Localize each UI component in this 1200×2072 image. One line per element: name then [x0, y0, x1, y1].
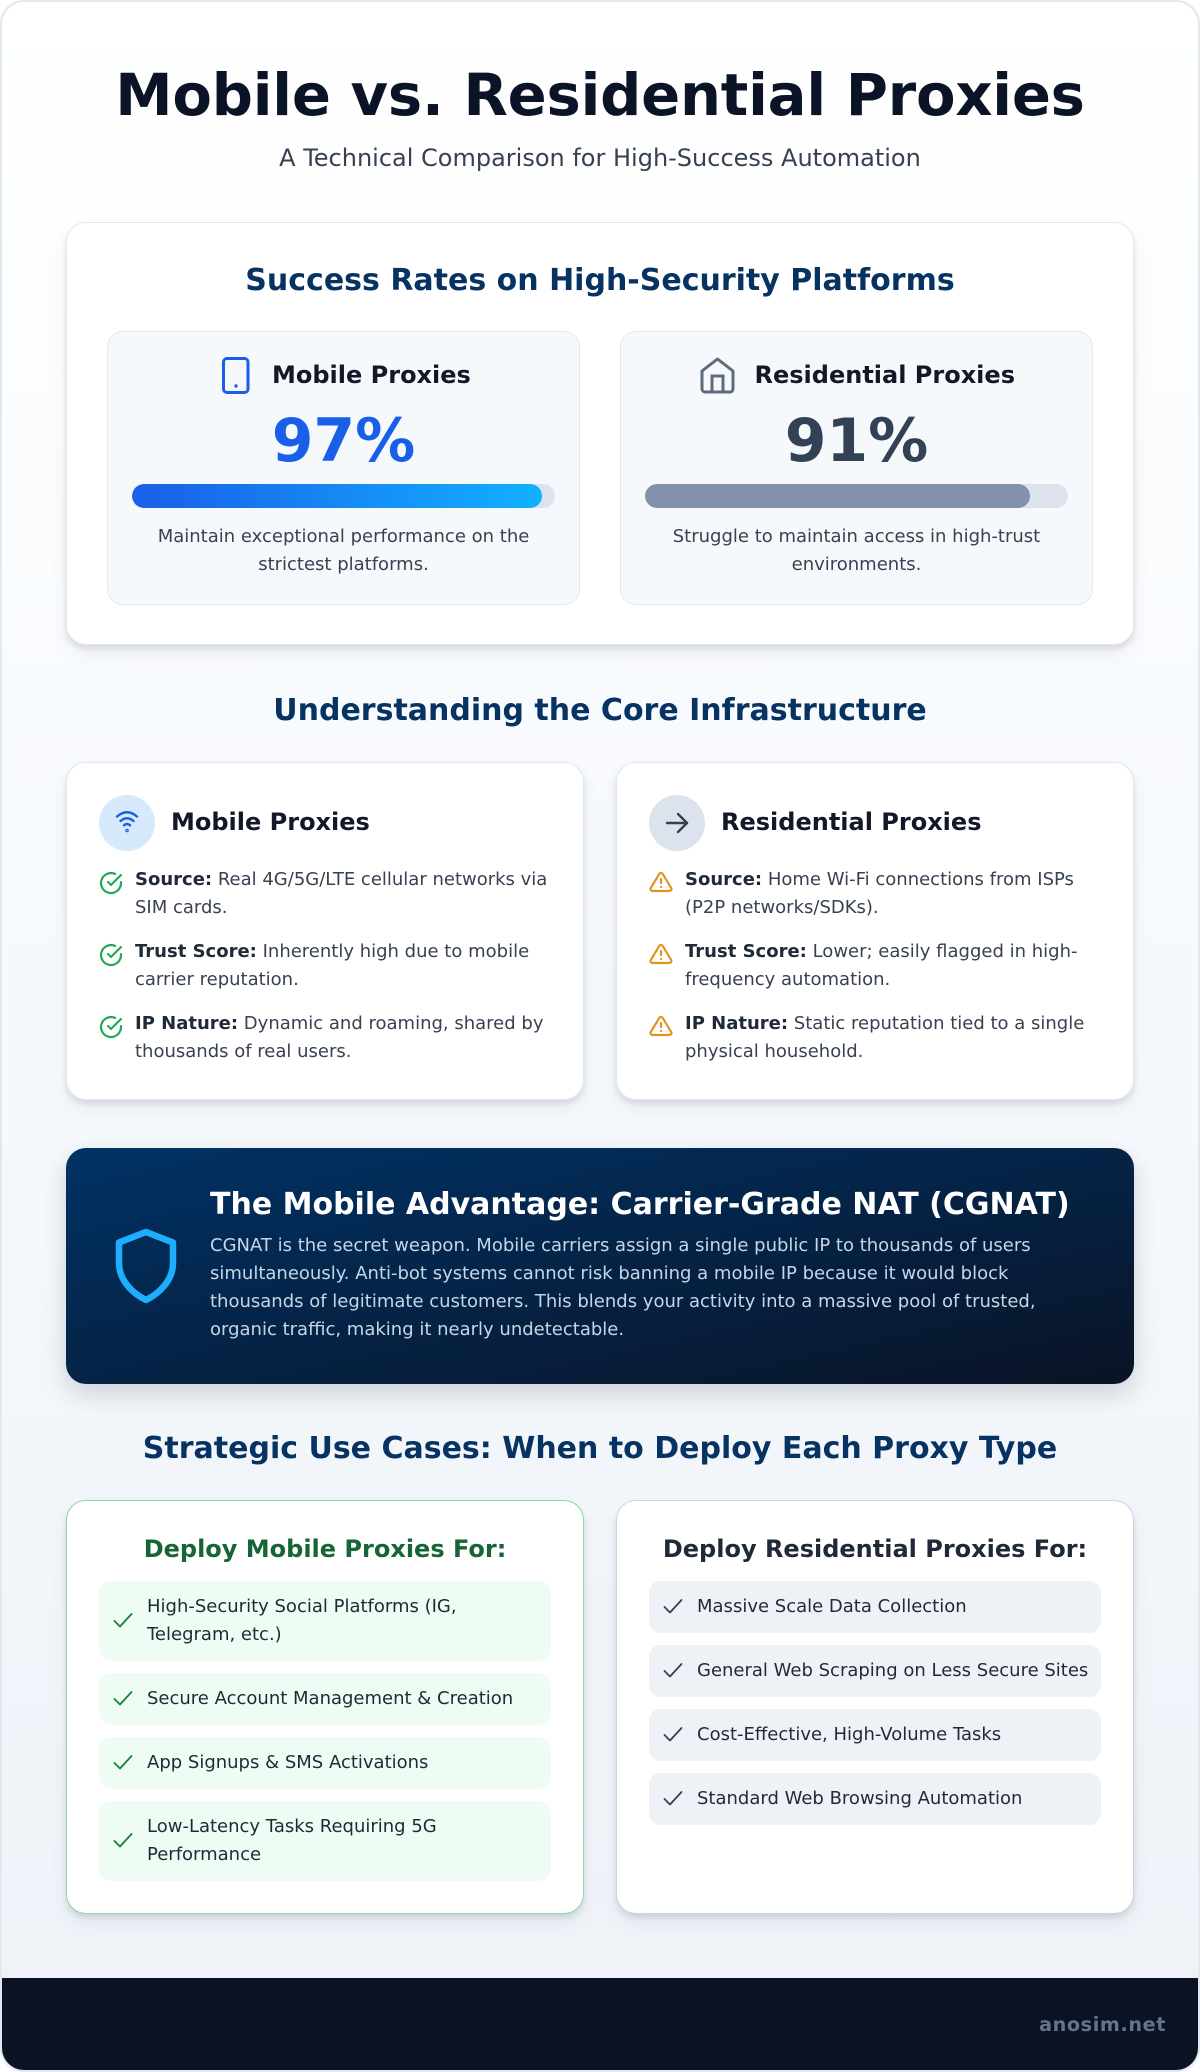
- title: Mobile vs. Residential Proxies: [115, 62, 1085, 129]
- list item: ip nature: [685, 1013, 1084, 1062]
- list item: source: [685, 869, 1074, 918]
- description: mobile: strictest platforms.: [258, 554, 429, 575]
- list item: ip nature: IP Nature: Static reputation tied to a single: [685, 1013, 1084, 1034]
- text block: CGNAT explanation: simultaneously. Anti-bot systems cannot risk banning a mobile IP because it would block: [210, 1263, 1008, 1284]
- panel: residential use cases: [616, 1500, 1134, 1914]
- icon: phone: [222, 357, 250, 394]
- list item: source: SIM cards.: [135, 897, 228, 918]
- list item: ip nature: thousands of real users.: [135, 1041, 352, 1062]
- footer: [2, 1978, 1198, 2070]
- label: residential proxies: Residential Proxies: [754, 361, 1015, 389]
- panel: success rates: [66, 222, 1134, 645]
- use case: social platforms: [99, 1581, 551, 1661]
- use case: browsing automation: [649, 1773, 1101, 1825]
- text block: CGNAT explanation: thousands of legitimate customers. This blends your activity into a massive pool of trusted,: [210, 1291, 1036, 1312]
- text block: CGNAT explanation: CGNAT is the secret weapon. Mobile carriers assign a single public IP to thousands of users: [210, 1235, 1031, 1256]
- list item: trust score: frequency automation.: [685, 969, 890, 990]
- heading: deploy residential: Deploy Residential Proxies For:: [663, 1535, 1087, 1563]
- icon: check circle: [100, 944, 122, 966]
- description: residential: Struggle to maintain access in high-trust: [673, 526, 1040, 547]
- use case: social platforms: Telegram, etc.): [147, 1624, 282, 1645]
- description: mobile: [158, 526, 529, 575]
- use case: data collection: Massive Scale Data Collection: [697, 1596, 967, 1617]
- list item: trust score: Trust Score: Inherently high due to mobile: [135, 941, 529, 962]
- list item: trust score: carrier reputation.: [135, 969, 299, 990]
- text block: CGNAT explanation: [210, 1235, 1036, 1340]
- description: residential: environments.: [792, 554, 921, 575]
- list item: ip nature: physical household.: [685, 1041, 863, 1062]
- description: mobile: Maintain exceptional performance on the: [158, 526, 529, 547]
- list item: trust score: [685, 941, 1077, 990]
- label: mobile proxies: Mobile Proxies: [272, 361, 471, 389]
- description: residential: [673, 526, 1040, 575]
- footer brand: anosim.net: [1039, 2013, 1166, 2036]
- list item: ip nature: IP Nature: Dynamic and roaming, shared by: [135, 1013, 543, 1034]
- use case: low latency: Low-Latency Tasks Requiring 5G: [147, 1816, 437, 1837]
- heading: success rates: Success Rates on High-Security Platforms: [245, 263, 955, 298]
- use case: web scraping: [649, 1645, 1101, 1697]
- list item: trust score: Trust Score: Lower; easily flagged in high-: [685, 941, 1077, 962]
- use case: web scraping: General Web Scraping on Less Secure Sites: [697, 1660, 1088, 1681]
- heading: use cases: Strategic Use Cases: When to Deploy Each Proxy Type: [143, 1431, 1057, 1466]
- panel: mobile infrastructure: [66, 762, 584, 1100]
- icon: check circle: [100, 1016, 122, 1038]
- icon: wifi: [99, 795, 155, 851]
- use case: high volume: [649, 1709, 1101, 1761]
- list item: ip nature: [135, 1013, 543, 1062]
- subtitle: A Technical Comparison for High-Success Automation: [279, 144, 921, 172]
- list item: source: Source: Home Wi-Fi connections from ISPs: [685, 869, 1074, 890]
- use case: app signups: [99, 1737, 551, 1789]
- progress bar: mobile 97%: [132, 484, 555, 508]
- use case: low latency: Performance: [147, 1844, 261, 1865]
- stat: 97%: 97%: [272, 406, 415, 476]
- heading: residential proxies: Residential Proxies: [721, 808, 981, 836]
- stat card: residential proxies: [620, 331, 1093, 605]
- icon: shield: [116, 1228, 176, 1304]
- text block: CGNAT explanation: organic traffic, making it nearly undetectable.: [210, 1319, 624, 1340]
- heading: deploy mobile: Deploy Mobile Proxies For:: [144, 1535, 506, 1563]
- icon: house: [700, 358, 734, 394]
- use case: browsing automation: Standard Web Browsing Automation: [697, 1788, 1022, 1809]
- progress bar: residential 91%: [645, 484, 1068, 508]
- list item: source: Source: Real 4G/5G/LTE cellular networks via: [135, 869, 547, 890]
- heading: core infrastructure: Understanding the Core Infrastructure: [273, 693, 927, 728]
- heading: mobile proxies: Mobile Proxies: [171, 808, 370, 836]
- use case: account management: Secure Account Management & Creation: [147, 1688, 513, 1709]
- use case: low latency: [99, 1801, 551, 1881]
- use case: social platforms: High-Security Social Platforms (IG,: [147, 1596, 457, 1617]
- panel: CGNAT callout: [66, 1148, 1134, 1384]
- panel: residential infrastructure: [616, 762, 1134, 1100]
- use case: app signups: App Signups & SMS Activations: [147, 1752, 428, 1773]
- stat: 91%: 91%: [785, 406, 928, 476]
- icon: arrow: [649, 795, 705, 851]
- icon: check circle: [100, 872, 122, 894]
- use case: account management: [99, 1673, 551, 1725]
- icon: warning: [649, 944, 673, 964]
- list item: trust score: [135, 941, 529, 990]
- icon: warning: [649, 1016, 673, 1036]
- list item: source: (P2P networks/SDKs).: [685, 897, 879, 918]
- panel: mobile use cases: [66, 1500, 584, 1914]
- use case: data collection: [649, 1581, 1101, 1633]
- list item: source: [135, 869, 547, 918]
- heading: CGNAT: The Mobile Advantage: Carrier-Grade NAT (CGNAT): [210, 1187, 1070, 1222]
- stat card: mobile proxies: [107, 331, 580, 605]
- use case: high volume: Cost-Effective, High-Volume Tasks: [697, 1724, 1001, 1745]
- icon: warning: [649, 872, 673, 892]
